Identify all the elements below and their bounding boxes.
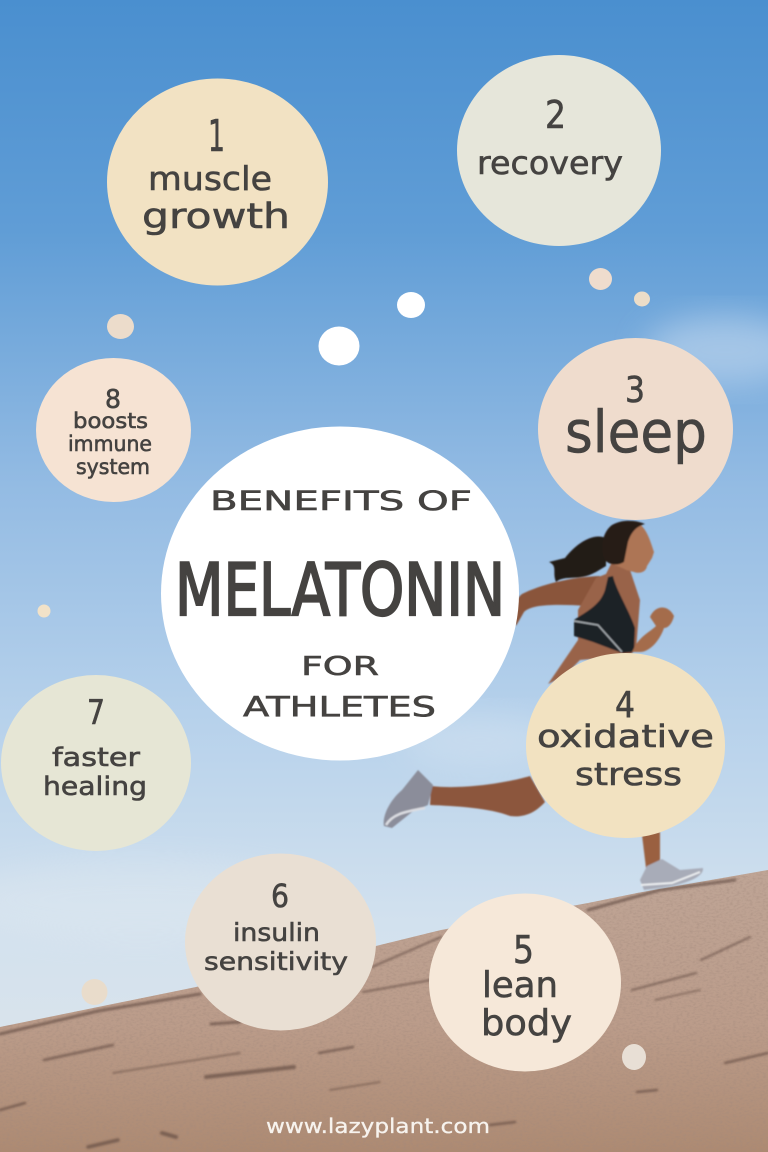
runner back leg [430, 776, 545, 816]
bubble 7: faster healing: 7 [87, 693, 105, 733]
runner front arm [632, 607, 674, 652]
heading: melatonin: MELATONIN [175, 548, 505, 632]
bubble 1: muscle growth: 1 [208, 111, 225, 162]
bubble 1: muscle growth [107, 78, 328, 286]
runner hair [602, 521, 645, 564]
bubble 4: oxidative stress: stress [575, 757, 682, 793]
bubble 6: insulin sensitivity: insulin [233, 918, 320, 947]
bubble 3: sleep: sleep [565, 398, 707, 466]
bubble 7: faster healing [1, 675, 191, 851]
heading: athletes: ATHLETES [243, 690, 436, 723]
bubble 8: boosts immune system: immune [68, 432, 152, 456]
bubble 8: boosts immune system: system [76, 455, 150, 479]
bubble 2: recovery: recovery [477, 144, 623, 182]
runner back arm [515, 576, 600, 626]
runner head [606, 521, 654, 573]
bubble 8: boosts immune system [36, 358, 191, 502]
runner back shoe [384, 770, 433, 828]
bubble 5: lean body [429, 894, 621, 1072]
runner [384, 521, 703, 890]
bubble 4: oxidative stress [526, 653, 725, 838]
runner top trim [574, 621, 622, 652]
website: www.lazyplant.com [266, 1114, 490, 1138]
runner neck and torso [548, 558, 640, 684]
bubble 7: faster healing: faster [52, 743, 140, 773]
center circle: title [161, 426, 519, 760]
rock slope [0, 870, 768, 1152]
bubble 5: lean body: body [481, 1003, 572, 1044]
bubble 1: muscle growth: muscle [148, 159, 272, 198]
runner ponytail [549, 536, 606, 582]
bubble 6: insulin sensitivity: 6 [271, 877, 289, 915]
bubble 7: faster healing: healing [43, 772, 147, 802]
bubble 6: insulin sensitivity [185, 854, 376, 1030]
bubble 8: boosts immune system: 8 [105, 385, 121, 415]
heading: benefits of: BENEFITS OF [210, 486, 472, 517]
bubble 4: oxidative stress: oxidative [537, 719, 714, 755]
bubble 2: recovery: 2 [545, 93, 566, 137]
runner front shin [642, 832, 660, 868]
bubble 3: sleep: 3 [625, 370, 645, 411]
bubble 2: recovery [457, 55, 661, 246]
bubble 1: muscle growth: growth [142, 197, 290, 237]
heading: for: FOR [301, 652, 379, 682]
small dots [38, 268, 650, 1070]
bubble 6: insulin sensitivity: sensitivity [204, 947, 348, 976]
runner sports top [574, 576, 635, 653]
runner front shoe [640, 859, 703, 890]
bubble 4: oxidative stress: 4 [615, 685, 635, 726]
bubble 5: lean body: lean [482, 965, 558, 1006]
bubble 3: sleep [538, 338, 733, 520]
bubble 5: lean body: 5 [513, 928, 534, 972]
bubble 8: boosts immune system: boosts [73, 409, 148, 433]
